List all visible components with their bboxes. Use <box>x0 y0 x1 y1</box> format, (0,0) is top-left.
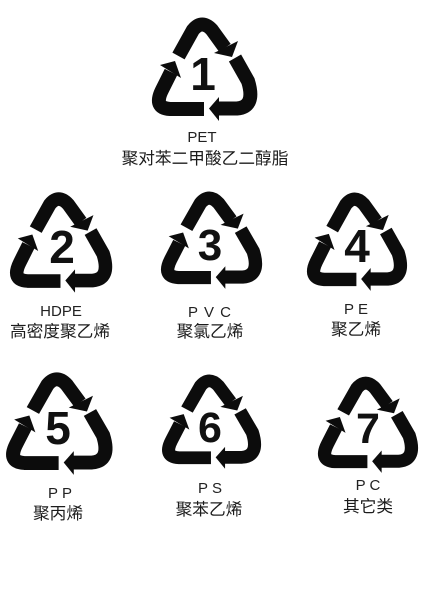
symbol 7 PC: 7 <box>356 405 380 453</box>
symbol 4 PE: 聚乙烯 <box>331 320 381 339</box>
symbol 5 PP: P P <box>48 485 72 502</box>
symbol 7 PC: P C <box>356 477 381 494</box>
symbol 1 PET <box>122 24 288 168</box>
symbol 2 HDPE: 高密度聚乙烯 <box>10 322 110 341</box>
symbol 2 HDPE: 2 <box>49 221 75 273</box>
symbol 6 PS: P S <box>198 480 222 497</box>
symbol 1 PET: PET <box>187 129 217 146</box>
symbol 7 PC: 其它类 <box>343 497 393 516</box>
symbol 3 PVC: 聚氯乙烯 <box>177 322 243 341</box>
symbol 6 PS: 聚苯乙烯 <box>176 500 242 519</box>
symbol 7 PC <box>325 383 411 516</box>
symbol 5 PP <box>13 379 105 523</box>
symbol 3 PVC <box>168 198 255 341</box>
symbol 5 PP: 聚丙烯 <box>33 504 83 523</box>
symbol 4 PE <box>314 199 400 339</box>
symbol 4 PE: 4 <box>344 220 370 272</box>
symbol 4 PE: P E <box>344 301 368 318</box>
symbol 3 PVC: 3 <box>198 221 222 270</box>
symbol 6 PS <box>169 381 255 519</box>
symbol 3 PVC: P V C <box>188 304 232 321</box>
symbol 2 HDPE <box>10 199 110 341</box>
symbol 1 PET: 聚对苯二甲酸乙二醇脂 <box>122 149 288 168</box>
symbol 1 PET: 1 <box>190 48 216 100</box>
symbol 6 PS: 6 <box>198 404 222 452</box>
symbol 5 PP: 5 <box>45 402 71 454</box>
symbol 2 HDPE: HDPE <box>40 303 82 320</box>
